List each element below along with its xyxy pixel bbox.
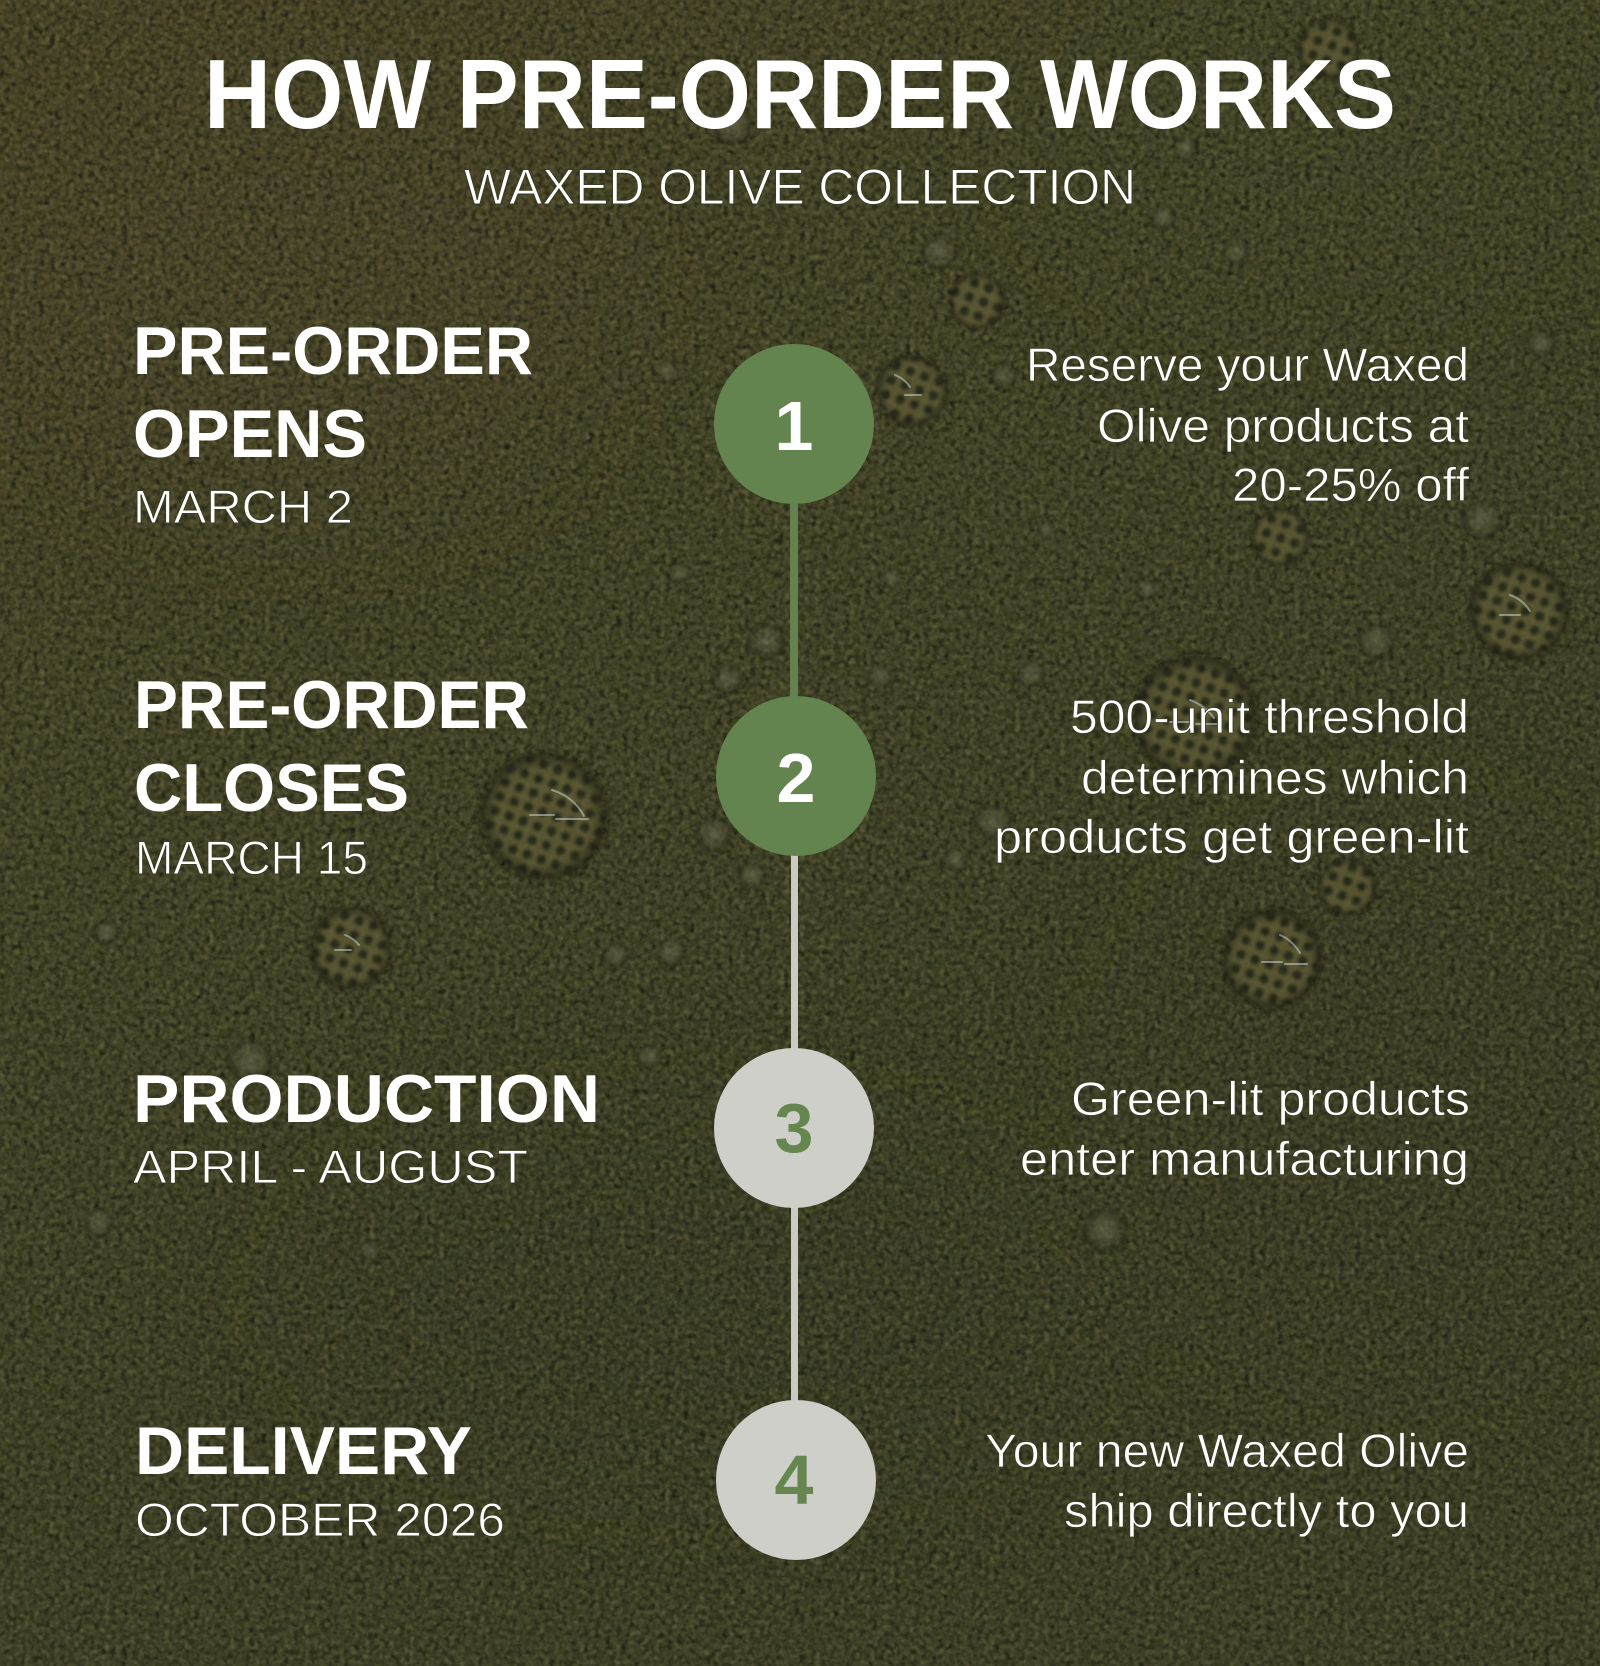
subtitle: WAXED OLIVE COLLECTION: [464, 159, 1136, 215]
step 2 heading: [134, 667, 529, 826]
step 1 description: [1026, 338, 1470, 511]
step 1 heading: OPENS: [133, 396, 367, 472]
step 3 description: Green-lit products: [1071, 1072, 1470, 1125]
step 1 description: Reserve your Waxed: [1026, 338, 1469, 391]
step 4 heading: DELIVERY: [135, 1413, 472, 1489]
step 3 date: APRIL - AUGUST: [133, 1140, 528, 1193]
step 3 description: [1020, 1072, 1470, 1185]
step 1 marker: 1: [775, 387, 813, 465]
step 2: [134, 667, 1469, 884]
step 3 marker: 3: [775, 1089, 813, 1167]
step 4: [135, 1400, 1469, 1560]
step 4 marker: [716, 1400, 876, 1560]
step 2 heading: CLOSES: [134, 750, 409, 826]
step 2 marker: [716, 696, 876, 856]
step 3 description: enter manufacturing: [1020, 1132, 1469, 1185]
step 1 description: Olive products at: [1097, 399, 1469, 452]
step 3 marker: [714, 1048, 874, 1208]
step 1 marker: [714, 344, 874, 504]
step 2 date: MARCH 15: [135, 831, 368, 884]
step 2 description: 500-unit threshold: [1070, 690, 1469, 743]
step 2 marker: 2: [777, 739, 815, 817]
step 4 description: [985, 1424, 1469, 1537]
title: HOW PRE-ORDER WORKS: [204, 39, 1396, 149]
step 3: [133, 1048, 1470, 1208]
step 4 date: OCTOBER 2026: [135, 1493, 505, 1546]
step 1: [133, 313, 1470, 533]
step 4 description: ship directly to you: [1064, 1484, 1469, 1537]
timeline connector lines: [790, 500, 798, 1405]
step 1 heading: PRE-ORDER: [133, 313, 533, 389]
step 4 marker: 4: [775, 1441, 814, 1519]
step 4 description: Your new Waxed Olive: [985, 1424, 1469, 1477]
step 3 heading: PRODUCTION: [133, 1061, 600, 1137]
step 1 heading: [133, 313, 533, 472]
step 2 description: products get green-lit: [994, 810, 1469, 863]
step 2 description: [994, 690, 1469, 863]
step 1 date: MARCH 2: [133, 480, 353, 533]
step 1 description: 20-25% off: [1232, 458, 1470, 511]
step 2 description: determines which: [1081, 751, 1469, 804]
step 2 heading: PRE-ORDER: [134, 667, 529, 743]
